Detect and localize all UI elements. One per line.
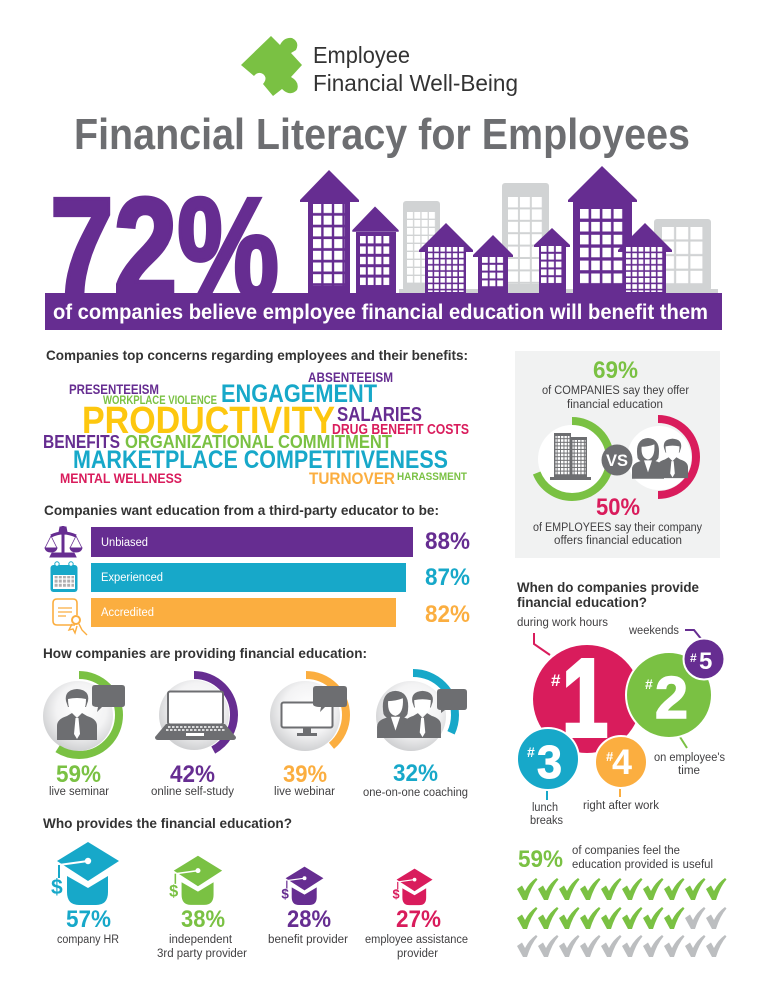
bar: unbiased: 88% — [425, 528, 470, 555]
word cloud: SALARIES — [337, 404, 422, 426]
item: independent 3rd party provider: 3rd party provider — [157, 948, 247, 960]
section: third-party educator bar chart — [44, 502, 470, 635]
logo: puzzle piece and wordmark — [241, 36, 518, 96]
text: useful: education provided is useful — [572, 859, 713, 871]
labels — [517, 617, 725, 827]
word cloud: PRODUCTIVITY — [82, 400, 335, 442]
labels: right after work — [583, 800, 659, 812]
section: how companies provide education — [39, 645, 468, 799]
text: employees say: offers financial education — [554, 535, 682, 547]
bubble: #3 lunch breaks — [517, 728, 579, 790]
item: independent 3rd party provider: $ — [169, 882, 178, 900]
badge: VS — [602, 444, 632, 476]
section: when companies provide education — [517, 579, 725, 827]
heading: financial education? — [517, 594, 647, 610]
word cloud: MENTAL WELLNESS — [60, 470, 182, 486]
heading: Companies top concerns regarding employees and their benefits: — [46, 347, 468, 363]
item: one-on-one coaching — [363, 673, 468, 799]
text: companies offer: of COMPANIES say they offer — [542, 385, 689, 397]
bubble: #1 during work hours: 1 — [562, 637, 608, 760]
panel: companies vs employees — [515, 351, 720, 558]
bubble: #5 weekends: # — [690, 651, 697, 665]
bubble: #1 during work hours: # — [551, 671, 561, 690]
item: live webinar: live webinar — [274, 786, 335, 798]
item: one-on-one coaching: 32% — [393, 760, 438, 787]
item: benefit provider — [268, 867, 348, 946]
stat: 69%: 69% — [593, 357, 638, 384]
labels: weekends — [628, 625, 679, 637]
word cloud: HARASSMENT — [397, 471, 467, 483]
heading: When do companies provide — [517, 579, 699, 595]
word cloud: ORGANIZATIONAL COMMITMENT — [125, 432, 392, 452]
labels: during work hours — [517, 617, 608, 629]
item: live webinar — [266, 675, 347, 798]
illustration: city skyline — [300, 166, 718, 294]
item: benefit provider: 28% — [287, 906, 331, 933]
hero: 72 percent with city skyline — [45, 166, 722, 330]
section: top concerns word cloud — [43, 347, 469, 488]
text: useful: of companies feel the — [572, 845, 680, 857]
heading: Who provides the financial education? — [43, 815, 292, 831]
item: online self-study — [151, 675, 236, 798]
heading: How companies are providing financial education: — [43, 645, 367, 661]
labels: time — [678, 765, 700, 777]
word cloud: BENEFITS — [43, 432, 120, 452]
stat: 50%: 50% — [596, 494, 640, 521]
item: employee assistance provider: 27% — [396, 906, 441, 933]
bar: unbiased — [91, 527, 470, 557]
checkmark grid — [517, 878, 726, 957]
word cloud: ABSENTEEISM — [308, 369, 393, 385]
bubble: #2 on employee's time: # — [645, 676, 653, 692]
icon: scales — [45, 526, 82, 557]
big stat: 72%: 72% — [50, 168, 279, 329]
item: benefit provider: benefit provider — [268, 934, 348, 946]
word cloud — [43, 369, 469, 488]
ring: employees — [620, 419, 696, 495]
stat: 59%: 59% — [518, 846, 563, 873]
item: independent 3rd party provider — [157, 856, 247, 960]
item: one-on-one coaching: one-on-one coaching — [363, 787, 468, 799]
bar: experienced: Experienced — [101, 572, 163, 584]
labels: breaks — [530, 815, 563, 827]
item: employee assistance provider: employee assistance — [365, 934, 468, 946]
item: benefit provider: $ — [281, 886, 289, 901]
badge: VS: VS — [606, 451, 628, 470]
item: employee assistance provider: $ — [393, 887, 400, 902]
bubble: #2 on employee's time: 2 — [655, 665, 688, 731]
item: live seminar: 59% — [56, 761, 101, 788]
item: company HR — [51, 842, 119, 946]
item: company HR: $ — [51, 876, 63, 899]
word cloud: WORKPLACE VIOLENCE — [103, 395, 217, 407]
word cloud: ENGAGEMENT — [221, 380, 377, 408]
title: Financial Literacy for Employees — [74, 110, 690, 159]
bar: experienced: 87% — [425, 564, 470, 591]
bar: accredited — [91, 598, 470, 628]
ring: companies — [534, 421, 610, 497]
labels: lunch — [532, 802, 558, 814]
bubble: #5 weekends — [684, 638, 724, 680]
text: companies offer: financial education — [567, 399, 663, 411]
item: company HR: 57% — [66, 906, 111, 933]
word cloud: DRUG BENEFIT COSTS — [332, 422, 469, 438]
section: who provides education — [43, 815, 468, 960]
item: independent 3rd party provider: independent — [169, 934, 233, 946]
item: employee assistance provider — [365, 869, 468, 960]
item: live webinar: 39% — [283, 761, 327, 788]
leader lines — [534, 630, 702, 800]
bar: accredited: 82% — [425, 601, 470, 628]
bar: experienced — [91, 563, 470, 592]
item: employee assistance provider: provider — [397, 948, 438, 960]
bubble: #4 right after work — [595, 736, 647, 788]
heading: Companies want education from a third-party educator to be: — [44, 502, 439, 518]
bubble: #4 right after work: 4 — [612, 743, 633, 782]
word cloud: PRESENTEEISM — [69, 381, 159, 397]
bubble: #3 lunch breaks: # — [527, 744, 535, 760]
section: education usefulness — [517, 845, 726, 957]
word cloud: MARKETPLACE COMPETITIVENESS — [73, 446, 448, 474]
icon: calendar — [50, 562, 78, 592]
bubble: #2 on employee's time — [626, 652, 712, 738]
item: company HR: company HR — [57, 934, 119, 946]
item: online self-study: 42% — [170, 761, 215, 788]
bar: unbiased: Unbiased — [101, 537, 148, 549]
item: online self-study: online self-study — [151, 786, 234, 798]
item: live seminar: live seminar — [49, 786, 109, 798]
wordmark: Employee — [313, 42, 410, 68]
wordmark: Financial Well-Being — [313, 70, 518, 96]
item: independent 3rd party provider: 38% — [181, 906, 225, 933]
icon: certificate — [53, 599, 87, 635]
bar: accredited: Accredited — [101, 607, 154, 619]
banner text: of companies believe employee financial education will benefit them — [53, 301, 708, 324]
item: live seminar — [39, 675, 125, 798]
word cloud: TURNOVER — [309, 469, 395, 488]
bubble: #3 lunch breaks: 3 — [537, 736, 562, 788]
text: employees say: of EMPLOYEES say their company — [533, 522, 702, 534]
labels: on employee's — [654, 752, 725, 764]
bubble: #5 weekends: 5 — [699, 648, 712, 675]
banner — [45, 293, 722, 330]
icon: green puzzle piece — [241, 36, 302, 96]
bubble: #4 right after work: # — [606, 749, 614, 764]
bubble: #1 during work hours — [533, 637, 641, 760]
